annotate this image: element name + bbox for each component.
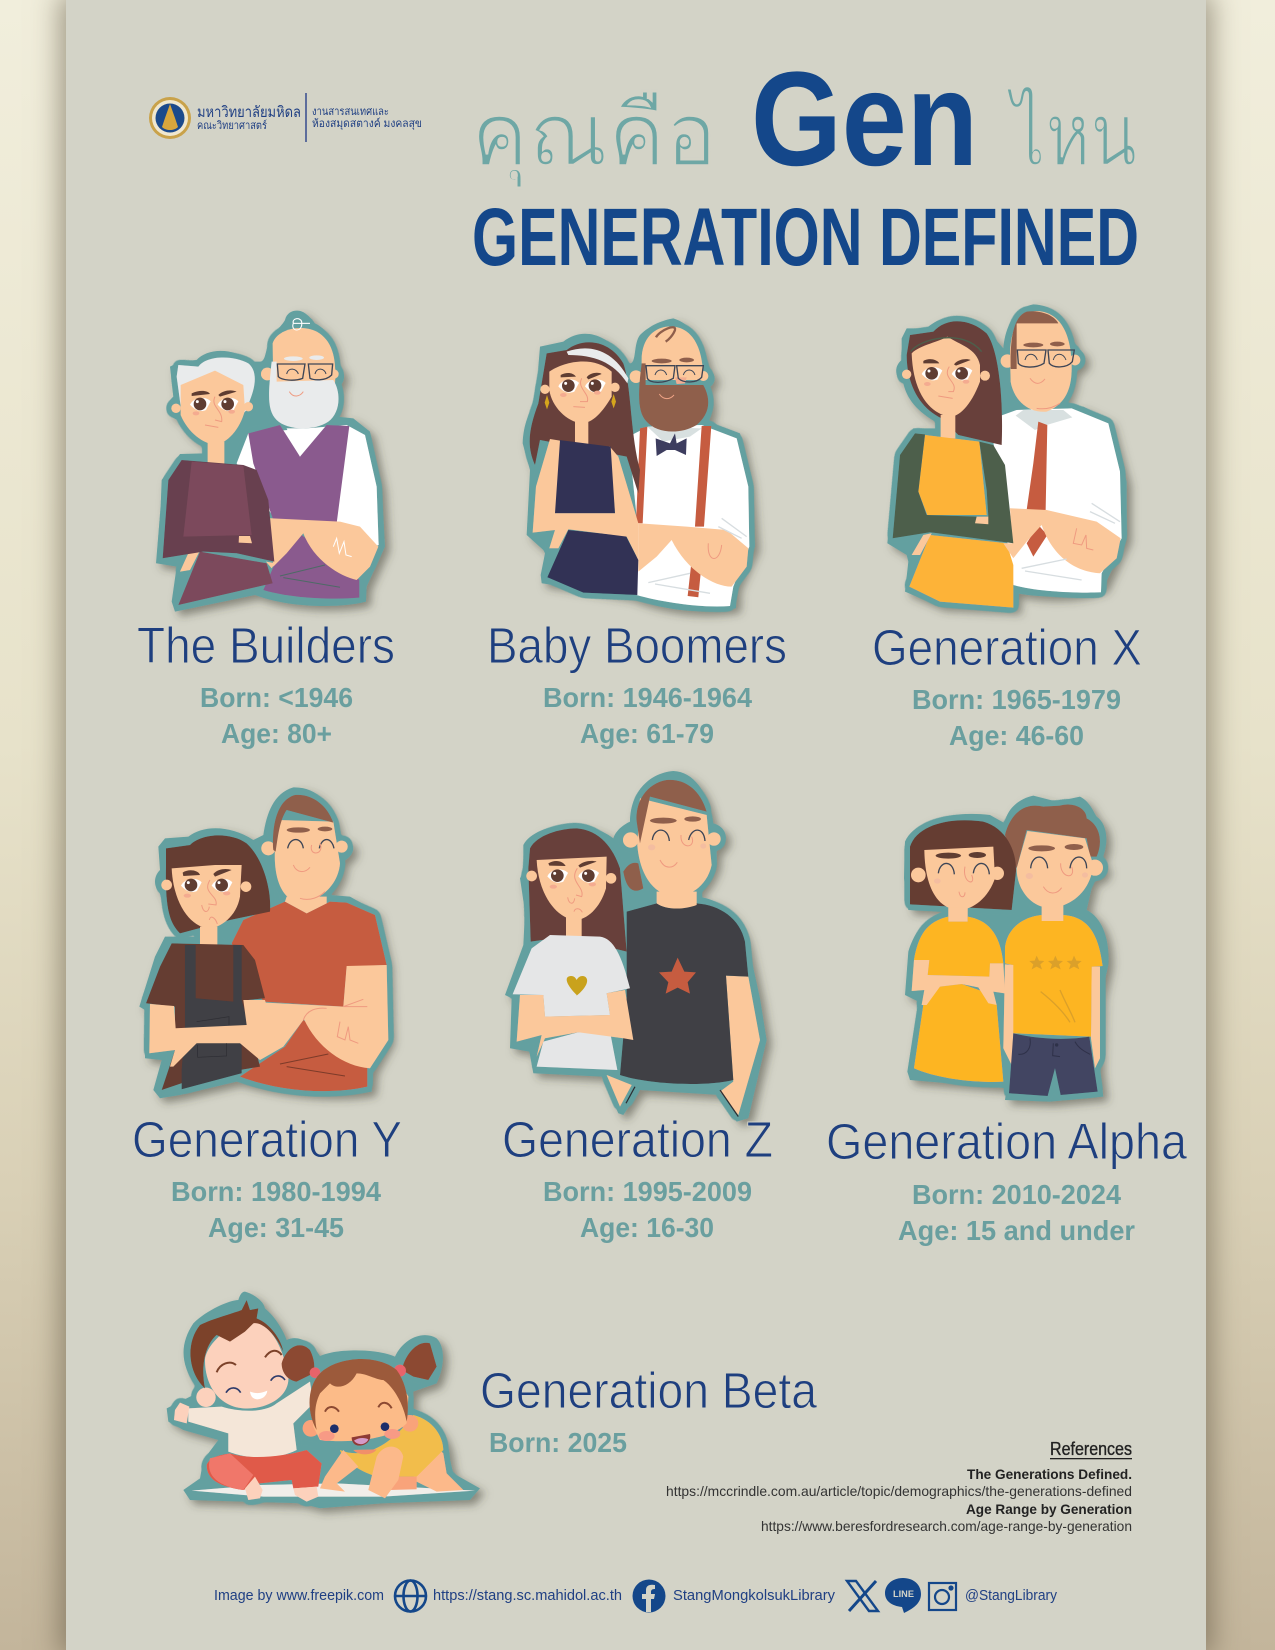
references: The Generations Defined. <box>967 1466 1132 1482</box>
label: Generation X <box>872 619 1142 751</box>
figure: Generation Alpha couple <box>904 796 1109 1102</box>
references: https://mccrindle.com.au/article/topic/demographics/the-generations-defined <box>666 1483 1132 1499</box>
icon: X <box>847 1581 878 1611</box>
label: Generation Y <box>132 1111 402 1243</box>
references: https://www.beresfordresearch.com/age-range-by-generation <box>761 1518 1132 1534</box>
label: Generation Z: Generation Z <box>502 1111 773 1168</box>
footer <box>214 1578 1057 1613</box>
university name: มหาวิทยาลัยมหิดล <box>197 104 301 121</box>
title: ไหน <box>1006 85 1137 184</box>
label: Generation Y: Born: 1980-1994 <box>171 1176 381 1207</box>
label: The Builders: Age: 80+ <box>221 718 332 749</box>
label: Generation Z <box>502 1111 773 1243</box>
figure: The Builders couple <box>156 311 385 612</box>
logo: Mahidol University: คณะวิทยาศาสตร์ <box>197 119 267 132</box>
title: Gen <box>751 45 978 194</box>
references: References <box>1050 1439 1132 1459</box>
label: Generation Y: Generation Y <box>132 1111 402 1168</box>
references <box>666 1439 1132 1534</box>
footer: https://stang.sc.mahidol.ac.th <box>433 1587 622 1604</box>
label: Generation Z: Age: 16-30 <box>580 1212 714 1243</box>
label: The Builders <box>137 617 395 749</box>
icon: facebook <box>632 1580 666 1612</box>
label: Generation Beta: Born: 2025 <box>489 1427 627 1458</box>
footer: StangMongkolsukLibrary <box>673 1587 835 1604</box>
label: Generation Z: Born: 1995-2009 <box>543 1176 752 1207</box>
title <box>471 45 1139 283</box>
label: Generation Alpha: Generation Alpha <box>826 1113 1188 1170</box>
icon: LINE: LINE <box>893 1589 914 1599</box>
label: Generation Alpha: Born: 2010-2024 <box>912 1179 1121 1210</box>
label: Generation Alpha <box>826 1113 1188 1246</box>
label: The Builders: Born: <1946 <box>200 682 353 713</box>
label: Generation X: Born: 1965-1979 <box>912 684 1121 715</box>
icon: Instagram <box>929 1583 956 1610</box>
logo: Mahidol University <box>149 93 422 142</box>
label: Generation Y: Age: 31-45 <box>208 1212 344 1243</box>
label: Baby Boomers: Born: 1946-1964 <box>543 682 752 713</box>
label: The Builders: The Builders <box>137 617 395 674</box>
label: Generation Alpha: Age: 15 and under <box>898 1215 1135 1246</box>
figure: Generation Z couple <box>505 771 767 1122</box>
label: Baby Boomers: Age: 61-79 <box>580 718 714 749</box>
logo: Mahidol University: ห้องสมุดสตางค์ มงคลสุข <box>312 117 422 130</box>
footer: Image by www.freepik.com <box>214 1587 384 1604</box>
figure: Generation Y couple <box>139 787 390 1098</box>
label: Baby Boomers <box>487 617 787 749</box>
figure: Baby Boomers couple <box>523 318 755 611</box>
label: Generation X: Age: 46-60 <box>949 720 1084 751</box>
icon: globe <box>395 1580 426 1612</box>
figure: Generation X couple <box>887 304 1127 610</box>
label: Baby Boomers: Baby Boomers <box>487 617 787 674</box>
icon: LINE <box>885 1578 921 1613</box>
label: Generation X: Generation X <box>872 619 1142 676</box>
figure: Generation Beta babies <box>167 1292 480 1508</box>
title: คุณคือ <box>471 85 717 188</box>
footer: @StangLibrary <box>965 1587 1057 1604</box>
label: Generation Beta: Generation Beta <box>480 1362 818 1419</box>
seal <box>149 97 191 139</box>
references: Age Range by Generation <box>966 1501 1132 1517</box>
library name: งานสารสนเทศและ <box>312 106 389 118</box>
label: Generation Beta <box>480 1362 818 1458</box>
